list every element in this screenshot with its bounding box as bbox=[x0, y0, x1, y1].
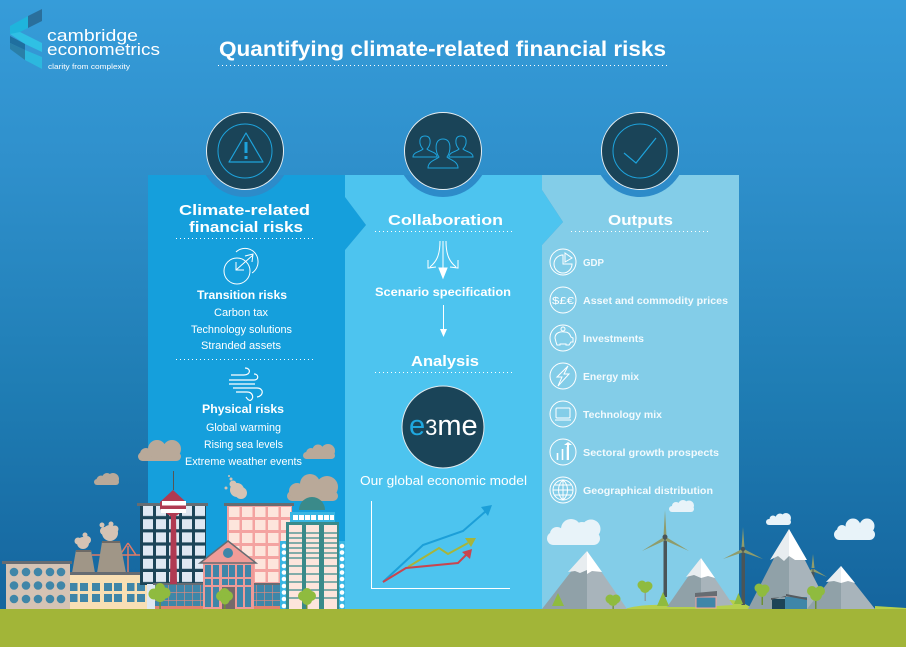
output: asset and commodity prices: Asset and commodity prices bbox=[583, 296, 728, 307]
text: physical risks: Extreme weather events bbox=[185, 456, 302, 468]
city: pink office tower bbox=[224, 503, 294, 585]
panel: outputs background bbox=[542, 175, 739, 610]
text: transition risks: Stranded assets bbox=[201, 340, 281, 352]
heading: climate-related financial risks: financial risks bbox=[189, 219, 303, 236]
e3me model badge bbox=[402, 386, 484, 468]
city: smoke puff bbox=[224, 475, 247, 499]
countryside: green hills bbox=[625, 600, 906, 609]
panel: climate-related financial risks background bbox=[148, 175, 366, 610]
city: dark office tower bbox=[137, 503, 208, 609]
text: transition risks: Technology solutions bbox=[191, 324, 292, 336]
output: sectoral growth prospects bbox=[550, 439, 719, 465]
city: storm clouds bbox=[94, 440, 338, 501]
heading: analysis bbox=[375, 353, 514, 372]
logo: econometrics bbox=[47, 40, 160, 59]
output: investments: Investments bbox=[583, 334, 644, 345]
icon: warning badge bbox=[206, 112, 284, 197]
output: geographical distribution bbox=[550, 477, 713, 503]
text: physical risks: Global warming bbox=[206, 422, 281, 434]
arrow: scenario to analysis bbox=[440, 305, 447, 337]
text: transition risks: Transition risks bbox=[197, 290, 287, 302]
ground bbox=[0, 609, 906, 647]
text: transition risks: Carbon tax bbox=[214, 307, 268, 319]
logo bbox=[10, 9, 160, 71]
output: technology mix: Technology mix bbox=[583, 410, 662, 421]
text: transition risks bbox=[176, 290, 315, 360]
text: scenario specification: Scenario specification bbox=[375, 287, 511, 299]
output: technology mix bbox=[550, 401, 662, 427]
heading: collaboration bbox=[375, 212, 514, 232]
city: left round-window building bbox=[2, 561, 72, 609]
heading: climate-related financial risks bbox=[176, 202, 315, 238]
heading: outputs: Outputs bbox=[608, 212, 673, 229]
output: energy mix: Energy mix bbox=[583, 372, 639, 383]
countryside: wind turbines bbox=[642, 510, 827, 605]
city: domed teal tower bbox=[280, 497, 345, 609]
output: asset and commodity prices: $£€ bbox=[552, 295, 574, 307]
icon: converging arrows bbox=[428, 241, 458, 278]
city: pink gabled house bbox=[200, 541, 256, 609]
heading: outputs bbox=[571, 212, 710, 232]
text: our global economic model: Our global economic model bbox=[360, 474, 527, 488]
e3me model badge: e3me bbox=[409, 410, 478, 442]
output: sectoral growth prospects: Sectoral growth prospects bbox=[583, 448, 719, 459]
output: asset and commodity prices bbox=[550, 287, 728, 313]
city: red telecom tower bbox=[160, 471, 186, 584]
icon: people badge bbox=[404, 112, 482, 197]
output: investments bbox=[550, 325, 644, 351]
heading: collaboration: Collaboration bbox=[388, 212, 503, 229]
output: energy mix bbox=[550, 363, 639, 389]
logo: clarity from complexity bbox=[48, 62, 130, 71]
countryside: trees bbox=[552, 580, 825, 609]
text: physical risks: Rising sea levels bbox=[204, 439, 283, 451]
panel: collaboration background bbox=[345, 175, 563, 610]
city: cream low building bbox=[70, 572, 150, 609]
line chart with three arrows bbox=[372, 501, 510, 588]
heading: climate-related financial risks: Climate-related bbox=[179, 202, 310, 219]
logo: cambridge bbox=[47, 26, 138, 45]
countryside: white clouds bbox=[547, 500, 875, 545]
text: physical risks bbox=[185, 404, 302, 468]
countryside: mountains bbox=[542, 529, 875, 609]
icon: wind bbox=[229, 368, 262, 400]
icon: check badge bbox=[600, 112, 680, 197]
icon: transition arrows bbox=[224, 248, 258, 284]
text: physical risks: Physical risks bbox=[202, 404, 284, 416]
heading: analysis: Analysis bbox=[411, 353, 479, 370]
output: GDP bbox=[550, 249, 604, 275]
title: Quantifying climate-related financial risks bbox=[219, 38, 666, 61]
city: cooling towers with steam bbox=[72, 522, 126, 573]
city: teal glazed low blocks bbox=[153, 583, 280, 609]
output: GDP: GDP bbox=[583, 258, 604, 269]
city: trees bbox=[148, 583, 316, 609]
city: crane bbox=[92, 543, 140, 573]
output: geographical distribution: Geographical distribution bbox=[583, 486, 713, 497]
countryside: houses bbox=[695, 591, 807, 609]
